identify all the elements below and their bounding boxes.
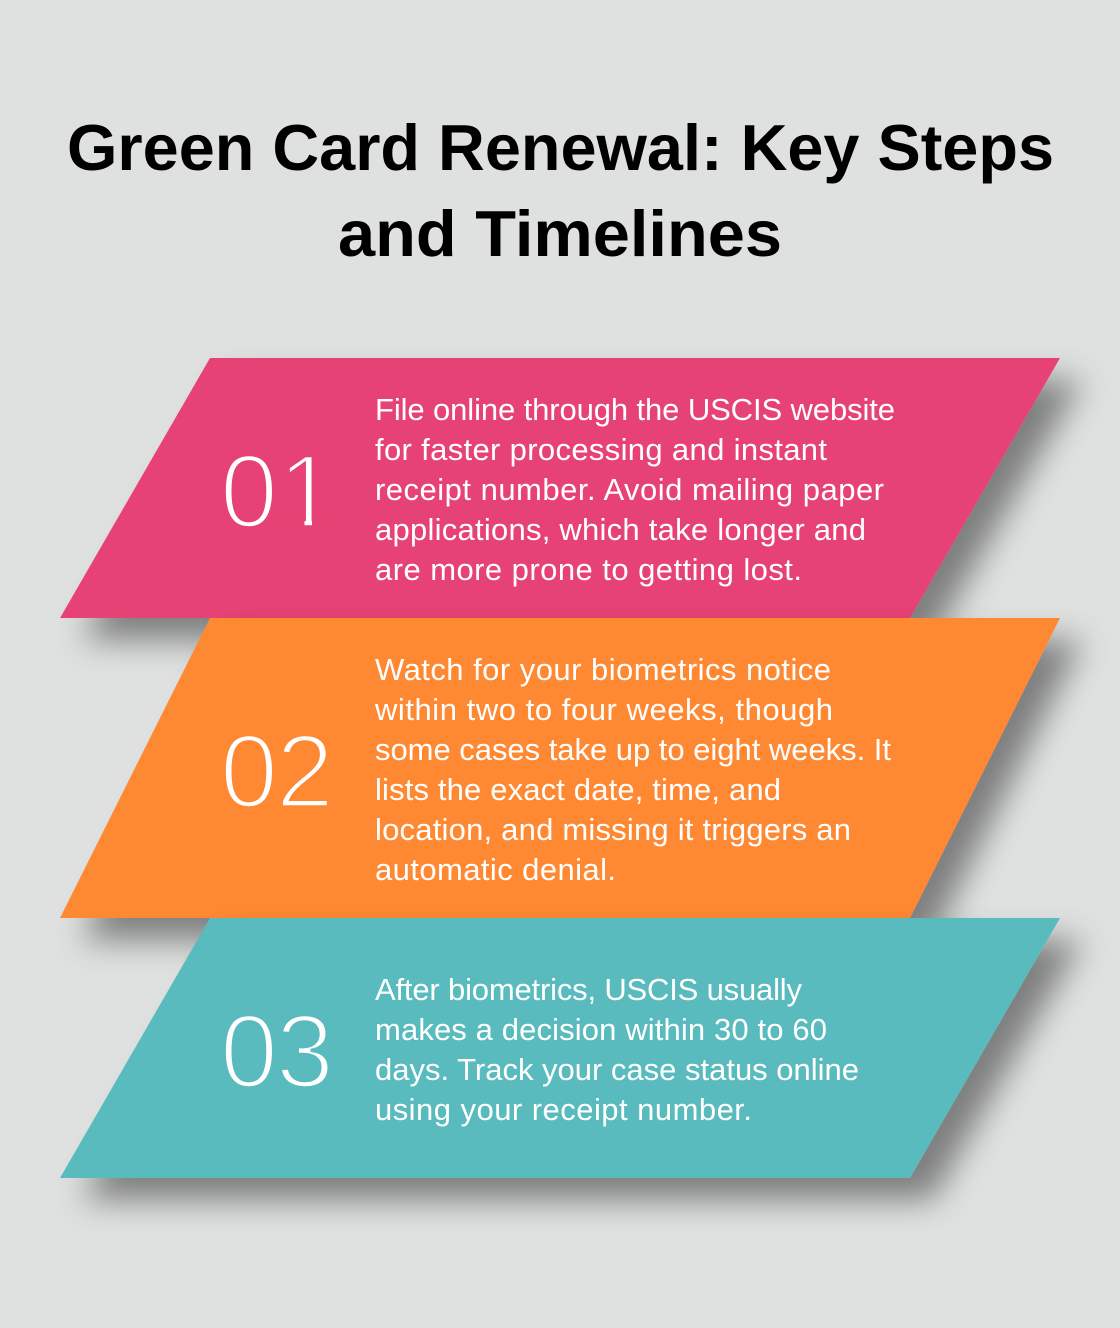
orange parallelogram — [60, 618, 1060, 918]
number 01: 01 — [220, 434, 336, 550]
number 02: 02 — [220, 714, 334, 830]
title: and Timelines — [338, 197, 782, 270]
number 03: 03 — [220, 994, 334, 1110]
step 1 text: File online through the USCIS website — [375, 392, 895, 427]
step 3 text — [375, 972, 859, 1127]
step 1 text: receipt number. Avoid mailing paper — [375, 472, 884, 507]
panel: step 2 — [60, 618, 1060, 918]
teal parallelogram — [60, 918, 1060, 1178]
step 3 text: using your receipt number. — [375, 1092, 752, 1127]
step 2 text — [374, 652, 891, 887]
step 2 text: automatic denial. — [375, 852, 616, 887]
pink parallelogram — [60, 358, 1060, 618]
step 1 text: for faster processing and instant — [375, 432, 827, 467]
panel: step 1 — [60, 358, 1060, 618]
step 2 text: lists the exact date, time, and — [375, 772, 781, 807]
step 2 text: some cases take up to eight weeks. It — [375, 732, 891, 767]
step 2 text: location, and missing it triggers an — [375, 812, 851, 847]
step 3 text: After biometrics, USCIS usually — [375, 972, 802, 1007]
panel: step 3 — [60, 918, 1060, 1178]
step 3 text: days. Track your case status online — [375, 1052, 859, 1087]
title — [67, 111, 1054, 270]
step 1 text: applications, which take longer and — [375, 512, 866, 547]
step 1 text: are more prone to getting lost. — [375, 552, 802, 587]
step 2 text: Watch for your biometrics notice — [375, 652, 831, 687]
title: Green Card Renewal: Key Steps — [67, 111, 1054, 184]
step 3 text: makes a decision within 30 to 60 — [375, 1012, 827, 1047]
step 2 text: within two to four weeks, though — [374, 692, 833, 727]
step 1 text — [375, 392, 895, 587]
